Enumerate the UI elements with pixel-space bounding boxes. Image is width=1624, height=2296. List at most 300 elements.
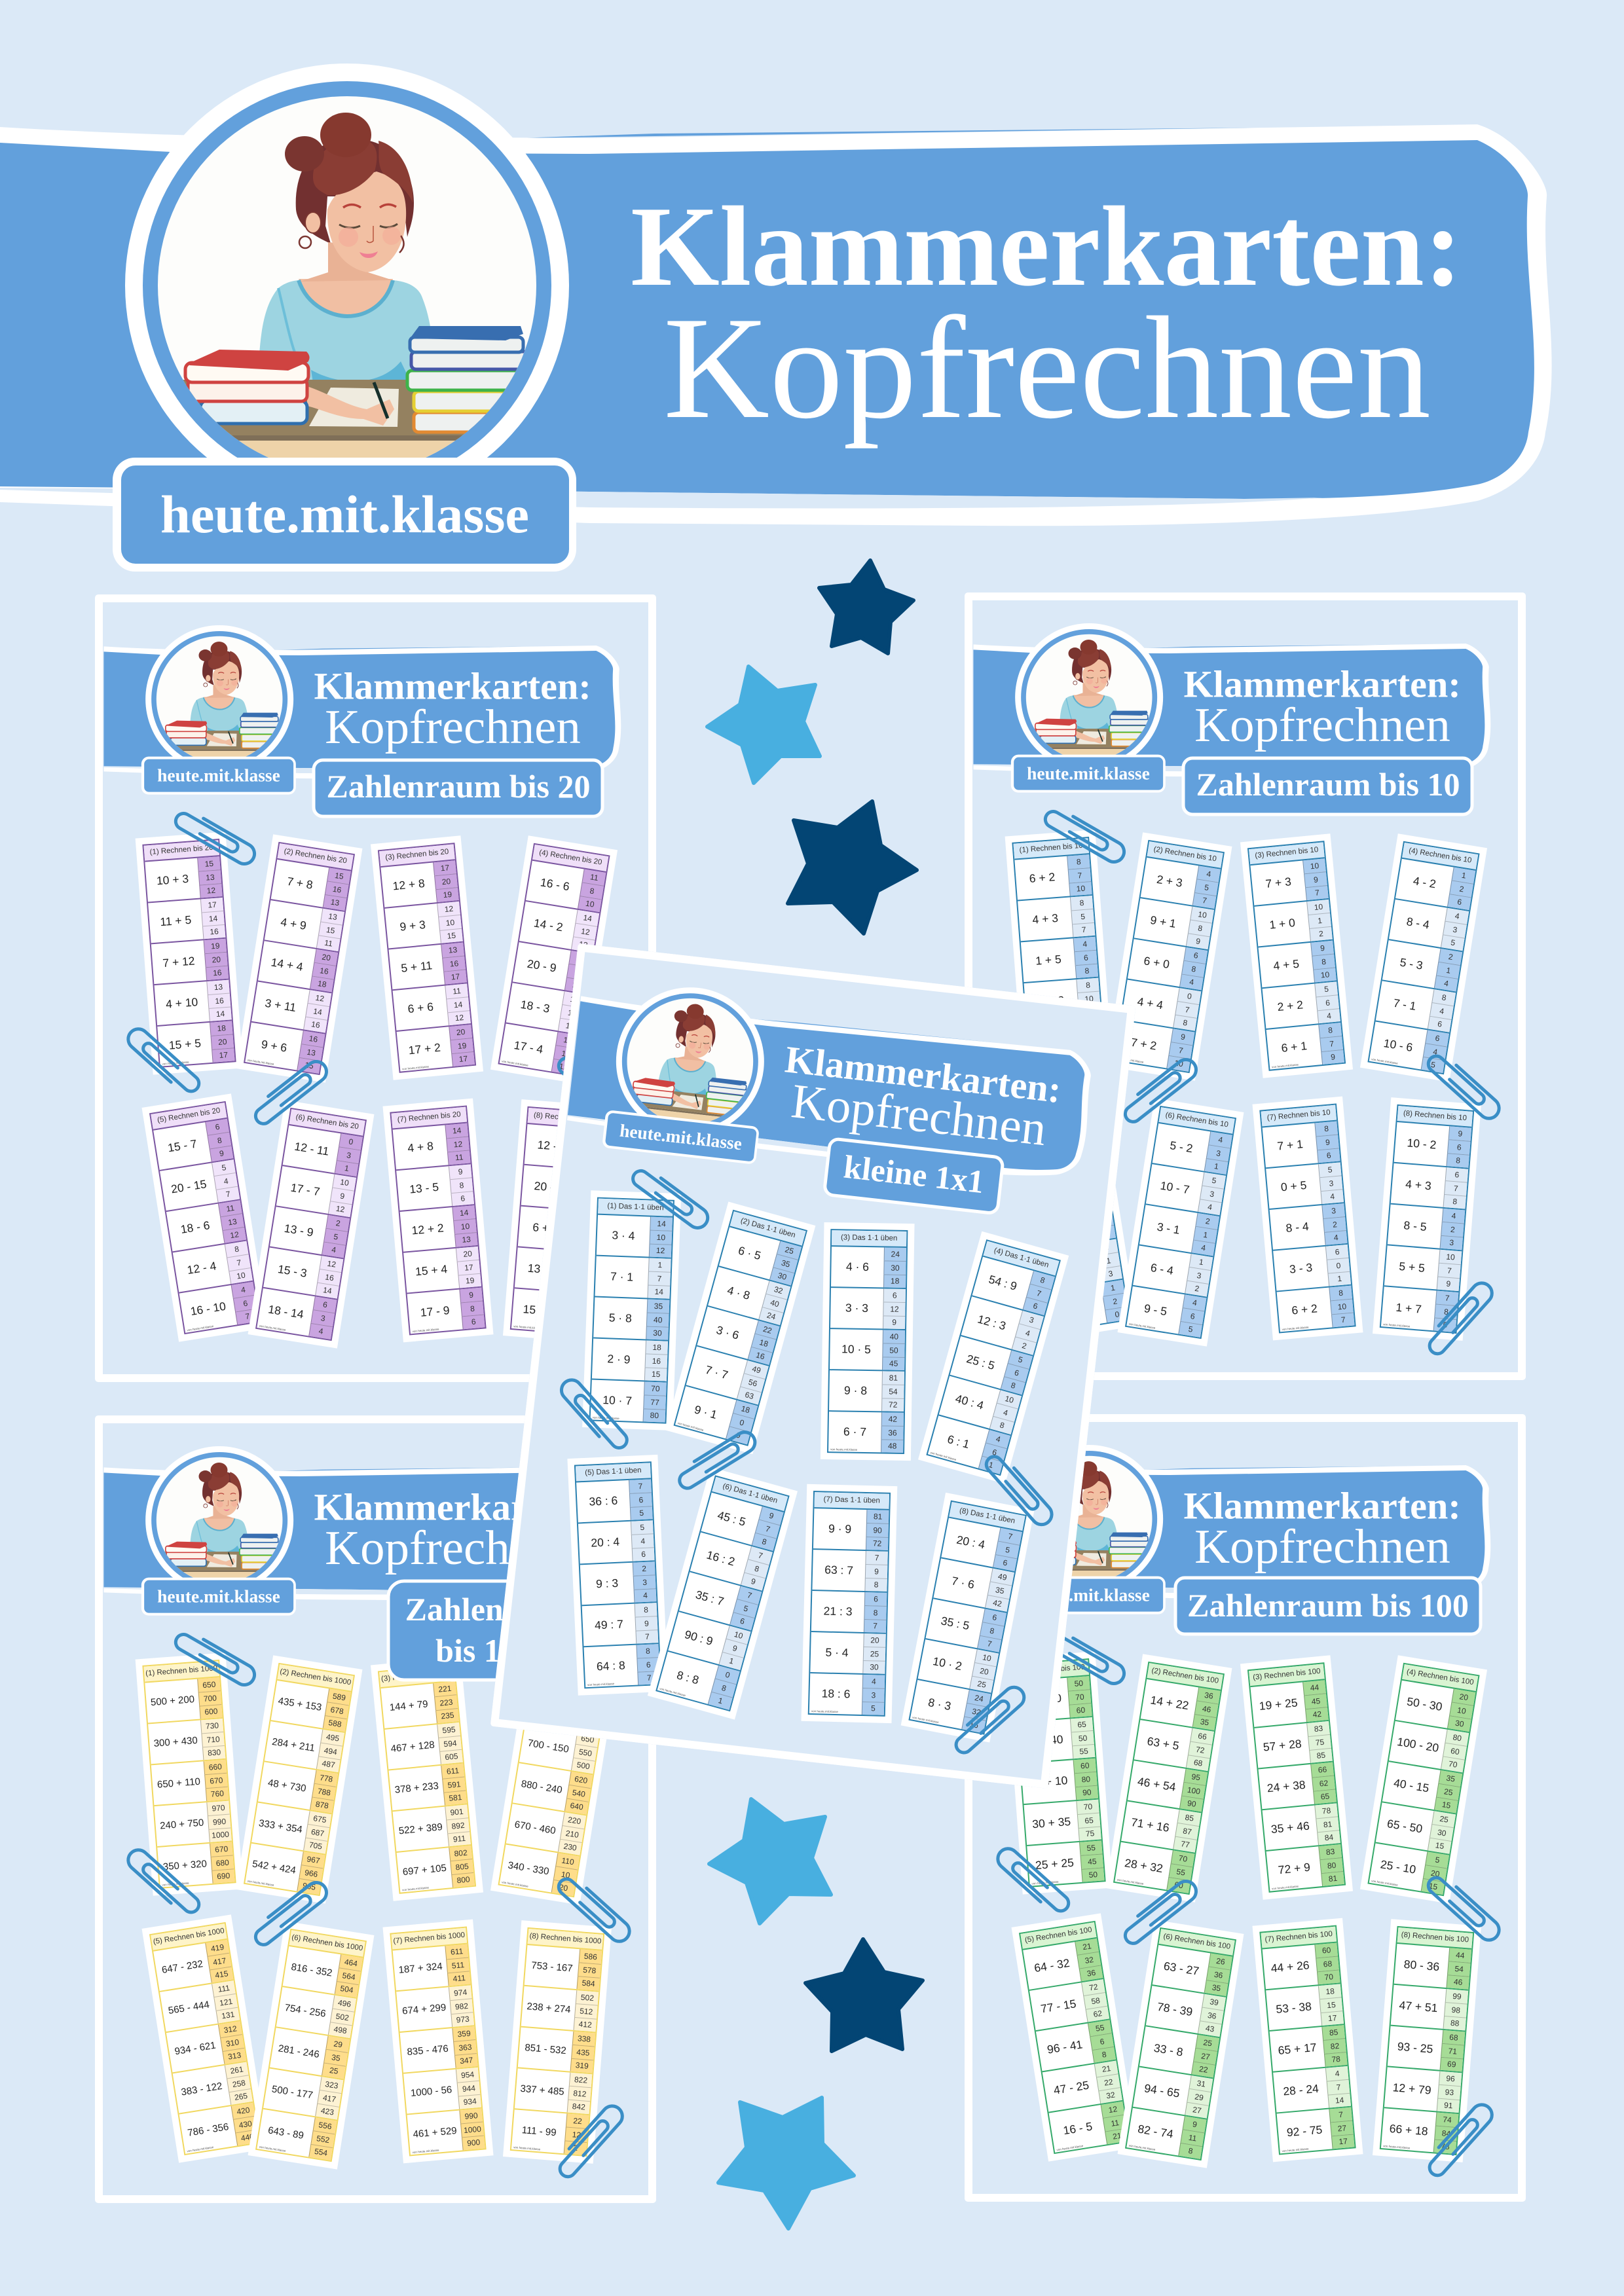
card 2: 7 [1185, 1005, 1190, 1015]
card 1: 10 [1076, 884, 1086, 894]
card 8: 822 [574, 2075, 588, 2085]
card 7: 359 [457, 2029, 471, 2039]
card 3: 1 + 0 [1269, 916, 1296, 932]
card 8: 96 [1446, 2074, 1455, 2084]
card 3: 4 + 5 [1273, 957, 1300, 972]
card 5: (5) Rechnen bis 20 [157, 1106, 221, 1124]
card 8: 502 [580, 1993, 594, 2003]
card 2: 16 [755, 1351, 766, 1362]
card 1: 12 [656, 1246, 665, 1256]
title line 1: Klammerkarten: [631, 183, 1462, 310]
card 7: 14 [452, 1126, 462, 1136]
card 1 [1012, 837, 1106, 1066]
card 7: 20 [870, 1635, 879, 1645]
card 5: 0 [1115, 1310, 1120, 1319]
card 5: 6 [646, 1660, 651, 1669]
card 5: 12 [1108, 2104, 1118, 2115]
card 3: 221 [438, 1684, 452, 1694]
card 1: 14 [208, 914, 218, 924]
card 8: 2 [573, 2143, 578, 2153]
card 6: 3 [1215, 1148, 1221, 1158]
card 7: 2 [1333, 1220, 1337, 1230]
card 3: 19 + 25 [1259, 1696, 1298, 1713]
card 2: 24 [766, 1311, 777, 1322]
card 5: 8 [644, 1605, 648, 1614]
card 5: von heute.mit.klasse [1056, 2144, 1083, 2151]
card 6 [255, 1929, 367, 2162]
card 1: 18 [217, 1023, 226, 1033]
card 4: 8 [1039, 1275, 1046, 1285]
card 6: 3 [1196, 1271, 1202, 1281]
card 3: 72 + 9 [1278, 1861, 1311, 1876]
card 2: 6 · 5 [737, 1244, 762, 1262]
card 1: 7 [657, 1274, 662, 1283]
card 3: 7 [1314, 888, 1320, 898]
card 8: 753 - 167 [531, 1960, 573, 1974]
card 6: 9 [1192, 2120, 1198, 2129]
card 5: 417 [212, 1956, 227, 1967]
card 3: 802 [454, 1848, 468, 1859]
card 4: 10 [561, 1870, 570, 1880]
card 4: 15 [1435, 1841, 1445, 1851]
card 8: 8 [586, 1158, 591, 1167]
card 8: 7 · 6 [951, 1574, 976, 1592]
card 8: 74 [1443, 2115, 1452, 2124]
card 6: 3 [320, 1313, 326, 1323]
card 1: 670 [215, 1844, 229, 1855]
card 8: 68 [1449, 2033, 1458, 2043]
card 2 [1113, 840, 1225, 1073]
card 2: 14 [312, 1006, 323, 1017]
card 2: 22 [762, 1324, 773, 1336]
card 2: 4 + 4 [1136, 994, 1164, 1011]
card 8: 8 [1444, 1307, 1449, 1317]
card 1: 50 [1088, 1870, 1098, 1880]
card 1: 55 [1079, 1747, 1088, 1757]
card 7: 982 [454, 2001, 469, 2011]
card 4: 60 [1450, 1746, 1460, 1757]
card 5: 96 - 41 [1046, 2037, 1084, 2056]
card 1: 10 [656, 1233, 665, 1242]
card 2: 8 [1183, 1018, 1188, 1028]
card 6: (6) Das 1·1 üben [722, 1482, 779, 1505]
card 5: 419 [210, 1942, 225, 1954]
card 2: 687 [310, 1827, 325, 1838]
card 1: 5 · 8 [608, 1311, 632, 1325]
card 2: 55 [1176, 1867, 1186, 1878]
card 3: 85 [1316, 1751, 1326, 1760]
card 1: 700 [203, 1694, 217, 1704]
card 3: 6 [1325, 998, 1331, 1008]
card 7: 974 [454, 1988, 468, 1998]
card 6: 27 [1192, 2105, 1202, 2115]
card 8: 25 [976, 1679, 987, 1690]
card 7: 10 [1337, 1302, 1347, 1311]
card 2: 30 [777, 1271, 788, 1282]
card 4: 11 [561, 1049, 570, 1059]
card 1: 50 [1074, 1679, 1084, 1688]
card 3: 581 [449, 1793, 462, 1803]
card 2: 18 [758, 1338, 769, 1349]
card 6: 26 [1215, 1956, 1226, 1967]
card 7: 7 [875, 1554, 879, 1563]
card 2: 675 [312, 1813, 327, 1825]
card 5: von heute.mit.klasse [187, 1324, 213, 1332]
card 7: 5 [1327, 1165, 1333, 1175]
card 5: 6 - 3 [1046, 1176, 1071, 1193]
card 5: 1 [1105, 1256, 1111, 1266]
card 2: von heute.mit.klasse [1116, 1057, 1144, 1064]
card 8: 19 [571, 1322, 580, 1332]
card 5: 6 [1099, 1215, 1105, 1225]
card 6: 12 [335, 1204, 345, 1214]
card 5: 16 - 10 [189, 1300, 227, 1318]
card 6: 39 [1209, 1997, 1219, 2007]
card 6: 10 - 7 [1160, 1179, 1190, 1196]
card 5: 12 - 4 [186, 1259, 217, 1277]
card 7: 19 [465, 1276, 475, 1286]
card 8: 10 [1446, 1252, 1455, 1262]
card 7: 63 : 7 [824, 1563, 853, 1577]
card 1: 8 [1090, 1049, 1096, 1058]
card 4: 50 - 30 [1406, 1695, 1443, 1713]
card 3: 10 [1310, 861, 1320, 871]
card 7: 6 [471, 1317, 476, 1326]
card 3: 17 + 2 [408, 1041, 441, 1057]
main header banner with title [0, 64, 1552, 572]
card 7: 461 + 529 [413, 2125, 457, 2140]
card 2: 25 [784, 1245, 795, 1256]
card 6: 5 [333, 1232, 339, 1242]
card 8: 54 [1454, 1964, 1464, 1974]
card 8: 93 [1445, 2087, 1454, 2097]
card 8: (8) Rechnen bis 100 [1401, 1931, 1469, 1944]
card 2: 4 [1206, 869, 1211, 879]
card 5: 111 [217, 1983, 231, 1994]
card 6: 8 [720, 1683, 728, 1693]
card 5: von heute.mit.klasse [187, 2145, 213, 2153]
card 8: 238 + 274 [526, 2001, 571, 2015]
card 5: 4 [643, 1591, 648, 1600]
card 8: von heute.mit.klasse [1383, 2144, 1410, 2149]
card 4: 12 [572, 980, 581, 991]
card 5: 430 [238, 2119, 253, 2130]
card 6: 12 - 11 [293, 1140, 330, 1158]
card 1: 8 [1079, 898, 1084, 908]
card 3: 72 [889, 1400, 897, 1410]
card 1: 35 [654, 1302, 663, 1311]
card 2: 9 [1180, 1032, 1186, 1042]
card 5: 3 - 2 [1059, 1258, 1084, 1274]
card 4: von heute.mit.klasse [502, 1880, 528, 1888]
card 1: 14 [215, 1010, 225, 1019]
card 6: 502 [335, 2011, 350, 2022]
card 5: 58 [1090, 1995, 1101, 2006]
card 8: (8) Rechnen bis 1000 [529, 1932, 602, 1946]
card 3: 81 [1323, 1819, 1333, 1829]
card 6: 554 [314, 2147, 328, 2158]
card 5: 4 [1095, 1188, 1101, 1197]
card 8: 4 [1451, 1211, 1456, 1221]
card 7: 17 [464, 1263, 473, 1273]
card 1: 830 [208, 1748, 221, 1758]
card 3: 10 [445, 918, 455, 928]
card 8: 7 [1007, 1531, 1013, 1541]
card 5: 3 [642, 1578, 647, 1587]
card 7: (7) Rechnen bis 1000 [393, 1931, 466, 1945]
card 5: 7 [1097, 1201, 1103, 1211]
card 1: 730 [206, 1721, 219, 1731]
panel: Zahlenraum bis 10 [965, 592, 1526, 1380]
card 6: 564 [342, 1971, 356, 1982]
card 5: 420 [236, 2105, 250, 2117]
card 3: 892 [451, 1821, 465, 1831]
card 3: 30 [891, 1264, 900, 1273]
card 6: 14 [322, 1286, 333, 1296]
card 7: 27 [1337, 2123, 1347, 2133]
panel header: Klammerkarten: [314, 665, 591, 708]
card 8: 6 [1456, 1142, 1462, 1152]
card 3: 66 [1318, 1765, 1327, 1775]
badge and paper clips: bis 1000 [435, 1632, 549, 1669]
card 6: 3 [346, 1150, 352, 1160]
card 1: 15 + 5 [168, 1036, 202, 1052]
card 6: 3 [1209, 1189, 1215, 1199]
card 3: 2 + 2 [1277, 998, 1304, 1013]
card 5: 7 [647, 1673, 652, 1683]
card 6: von heute.mit.klasse [259, 1324, 286, 1332]
card 4: 100 - 20 [1396, 1735, 1440, 1755]
card 7: 10 [460, 1222, 470, 1231]
card 2: 36 [1204, 1690, 1214, 1701]
card 4: 6 [1456, 898, 1462, 907]
card 1: 15 [652, 1370, 661, 1379]
card 4: 5 - 3 [1399, 955, 1424, 972]
card 4: 25 - 10 [1380, 1857, 1417, 1876]
card 7: 3 - 3 [1289, 1261, 1313, 1276]
card 6: 5 - 2 [1169, 1139, 1194, 1155]
card 2: 66 [1197, 1731, 1208, 1741]
card 2: 13 [327, 911, 338, 922]
card 8: 319 [575, 2061, 589, 2071]
card 6: 13 - 9 [284, 1222, 314, 1239]
card 6: 16 [324, 1272, 335, 1283]
card 7: 30 [870, 1663, 879, 1672]
card 1: (1) Rechnen bis 10 [1019, 842, 1083, 854]
card 4: (4) Das 1·1 üben [993, 1247, 1050, 1269]
card 2: 60 [1173, 1880, 1184, 1891]
card 8: 7 [1445, 1294, 1450, 1303]
card 5: 36 : 6 [589, 1494, 618, 1508]
card 8: 5 [1005, 1545, 1010, 1555]
card 7: 9 [469, 1290, 474, 1300]
card 5: 121 [219, 1997, 233, 2008]
card 4: von heute.mit.klasse [930, 1451, 957, 1461]
card 2: 20 [322, 953, 331, 963]
card 3 [1247, 841, 1346, 1071]
card 1: 5 + 3 [1038, 994, 1065, 1009]
card 4: 340 - 330 [507, 1860, 550, 1877]
card 1: 65 [1084, 1815, 1094, 1825]
card 4: 6 [1032, 1302, 1039, 1311]
card 5: 647 - 232 [161, 1958, 204, 1976]
card 6: 500 - 177 [271, 2084, 314, 2101]
card 4: 5 [1017, 1355, 1024, 1365]
badge and paper clips: Zahlenraum bis 20 [326, 768, 591, 805]
card 2: 18 [317, 979, 327, 989]
card 3: 611 [446, 1766, 460, 1776]
card 7: 18 [1325, 1986, 1335, 1996]
card 7: 18 : 6 [821, 1686, 851, 1701]
card 7: von heute.mit.klasse [811, 1709, 838, 1713]
card 5: 3 [1091, 1161, 1096, 1171]
card 4: 8 [1010, 1381, 1016, 1391]
card 8: 435 [576, 2047, 590, 2058]
card 3: 45 [1311, 1696, 1321, 1706]
card 5: 77 - 15 [1040, 1997, 1077, 2015]
card 5: 20 : 4 [591, 1535, 620, 1550]
card 4: von heute.mit.klasse [1371, 1879, 1398, 1887]
card 3: 16 [449, 958, 459, 969]
card 5: 310 [225, 2037, 240, 2049]
card 1: 9 [1088, 1022, 1094, 1031]
card 7: 8 [1338, 1288, 1344, 1298]
card 7: von heute.mit.klasse [412, 1328, 439, 1333]
card 6: 33 - 8 [1153, 2041, 1184, 2059]
card 2: 542 + 424 [251, 1858, 297, 1876]
card 1: 16 [213, 968, 222, 978]
card 8: 98 [1451, 2005, 1460, 2015]
card 4: 6 : 1 [946, 1432, 971, 1451]
card 2: 965 [302, 1881, 316, 1892]
card 3: 144 + 79 [389, 1698, 428, 1713]
card 2: 588 [328, 1718, 342, 1729]
card 7: 8 [1324, 1124, 1329, 1133]
card 8: 4 + 3 [1405, 1177, 1431, 1192]
card 4 [498, 843, 610, 1076]
brand pill text: heute.mit.klasse [160, 484, 529, 544]
card 4: 620 [574, 1774, 588, 1785]
card 1: 70 [651, 1384, 660, 1393]
card 6: 16 : 2 [705, 1548, 736, 1569]
card 5: 6 [215, 1122, 220, 1132]
card 4: 30 [1454, 1719, 1465, 1729]
card 7 [390, 1106, 487, 1335]
card 1: 8 [1084, 966, 1090, 975]
panel header: Klammerkarten: [314, 1486, 591, 1529]
card 1: 30 + 35 [1032, 1815, 1071, 1831]
card 1: 10 + 3 [156, 872, 189, 887]
card 8 [510, 1927, 604, 2157]
card 6: 281 - 246 [278, 2043, 320, 2060]
card 6: 323 [324, 2079, 339, 2090]
card 8: 338 [577, 2034, 591, 2044]
panel header: Kopfrechnen [325, 1521, 581, 1575]
card 7: 6 + 2 [1291, 1302, 1318, 1317]
card 8: 6 [1443, 1321, 1448, 1330]
badge and paper clips [126, 758, 604, 1125]
card 1: 17 [219, 1050, 229, 1060]
card 4: 4 [1432, 1047, 1438, 1057]
card 5: 261 [230, 2065, 244, 2076]
card 5: 6 [1086, 1134, 1092, 1143]
card 5: 21 [1112, 2131, 1122, 2141]
card 3: 62 [1319, 1778, 1329, 1789]
card 1: 12 [206, 886, 216, 896]
card 1 [142, 839, 236, 1068]
card 7: 17 - 9 [420, 1303, 450, 1319]
card 3: von heute.mit.klasse [402, 1065, 429, 1070]
card 2: 68 [1193, 1758, 1203, 1768]
card 3: 223 [439, 1698, 453, 1708]
card 5: 4 [1088, 1147, 1094, 1157]
card 8: 7 [987, 1639, 993, 1649]
card 2: 284 + 211 [271, 1736, 316, 1754]
card 8: 84 [1441, 2128, 1451, 2138]
card 8: 6 [1454, 1170, 1460, 1180]
card 1: 80 [650, 1411, 659, 1421]
card 8 [510, 1106, 604, 1336]
card 3: (3) Das 1·1 üben [841, 1233, 897, 1243]
card 7: von heute.mit.klasse [1282, 1326, 1309, 1331]
card 2: 16 [308, 1034, 318, 1044]
card 1: 990 [213, 1817, 227, 1827]
card 1: 15 [204, 859, 214, 869]
card 1 [1012, 1658, 1106, 1887]
badge and paper clips [996, 1576, 1501, 2178]
card 2: 9 [735, 1430, 742, 1440]
card 1: 65 [1077, 1720, 1086, 1730]
card 3: 378 + 233 [394, 1780, 439, 1796]
card 1: 300 + 430 [153, 1735, 198, 1749]
card 5: 2 + 5 [1051, 1217, 1079, 1233]
card 3: 4 · 6 [846, 1260, 869, 1273]
card 2: 95 [1191, 1772, 1201, 1783]
card 3: 17 [451, 972, 460, 982]
card 7: 28 - 24 [1283, 2082, 1320, 2098]
card 8: 8 · 3 [927, 1696, 952, 1713]
card 6: 1 [728, 1656, 735, 1666]
card 3: von heute.mit.klasse [402, 1886, 429, 1891]
card 1: von heute.mit.klasse [162, 1061, 189, 1066]
card 7: 21 : 3 [823, 1604, 853, 1618]
card 4 [498, 1664, 610, 1897]
card 2: 13 [330, 898, 340, 908]
star light top [707, 666, 820, 783]
card 1: 70 + 10 [1029, 1774, 1068, 1789]
card 6: 82 - 74 [1137, 2123, 1174, 2141]
card 4: 8 [1441, 993, 1447, 1002]
card 2: 778 [319, 1773, 333, 1784]
card 4: 8 [589, 886, 595, 896]
card 4: 15 [569, 994, 580, 1005]
card 4: 14 - 2 [533, 916, 564, 934]
card 6: 5 [1188, 1324, 1193, 1334]
card 5: 5 [1084, 1120, 1090, 1130]
card 4: 4 [1439, 1006, 1445, 1016]
card 7: 3 [871, 1690, 876, 1700]
card 4: 6 [991, 1448, 998, 1457]
panel: Zahlenraum bis 100 [965, 1414, 1526, 2202]
card 8: 512 [580, 2007, 593, 2016]
card 3: 20 [441, 877, 451, 886]
card 5: 64 : 8 [596, 1658, 625, 1673]
card 8: 20 - 8 [534, 1179, 564, 1195]
card 6: 94 - 65 [1143, 2081, 1181, 2100]
card 8: 111 - 99 [521, 2124, 557, 2138]
card 2: 8 [1197, 923, 1203, 933]
card 1: 60 [1076, 1705, 1086, 1715]
